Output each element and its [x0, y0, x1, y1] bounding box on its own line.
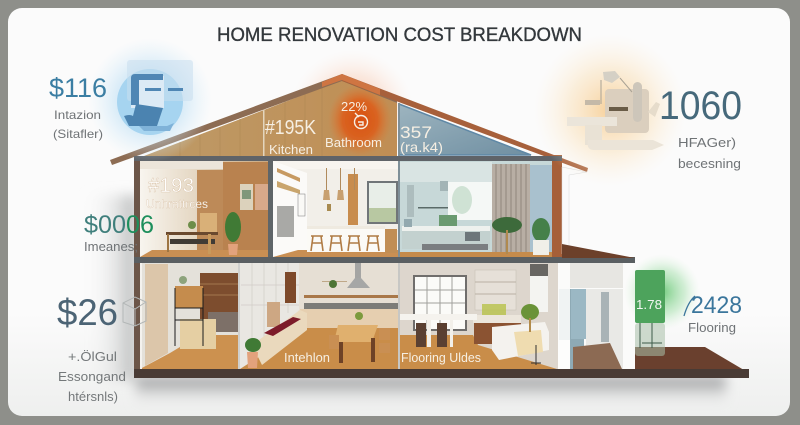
icon: box	[123, 297, 146, 326]
label: lines: Essongand	[58, 369, 126, 384]
label: Kitchen: Kitchen	[269, 142, 313, 157]
label: Intazion: Intazion	[54, 108, 101, 122]
label: 22%: 22%	[341, 99, 367, 114]
attic: bathroom hot spot	[328, 84, 392, 156]
label: beœsning: becesning	[678, 156, 741, 171]
label: Flooring: Flooring	[688, 320, 736, 335]
label: 195K: #195K	[265, 117, 317, 139]
roof: apex highlight	[322, 74, 380, 95]
floor beam: upper	[134, 156, 562, 161]
label: Intehlon: Intehlon	[284, 350, 330, 365]
label: Imeanes: Imeanes;	[84, 239, 138, 254]
label: HFAGer: HFAGer)	[678, 135, 736, 150]
left outer wall	[134, 158, 140, 378]
callout: top-right	[534, 34, 742, 186]
label: lines: htérsnls)	[68, 389, 118, 404]
callout: middle-left	[84, 211, 154, 254]
callout: bottom-left	[57, 292, 146, 404]
lower room 3	[400, 263, 558, 369]
label: Unitrattrces: Unhrattrces	[146, 197, 208, 211]
right eave glass	[562, 167, 587, 254]
right wood post	[552, 155, 562, 259]
upper room 3	[400, 161, 552, 257]
label: Flooring Uldes: Flooring Uldes	[401, 350, 481, 365]
lower roof	[562, 244, 635, 258]
callout: flooring	[624, 254, 742, 356]
glow: blue	[88, 38, 212, 162]
stat: 1060: 1060	[659, 84, 742, 128]
icon: timer	[354, 113, 368, 128]
upper room 1	[140, 161, 268, 257]
icon: slash mark	[684, 296, 695, 316]
callout: top-left	[49, 38, 212, 162]
glow: green	[624, 254, 700, 330]
roof: left slope	[110, 74, 397, 165]
label: lines: +.ÖlGul	[68, 349, 117, 364]
attic: light plank divider	[263, 108, 264, 156]
stat: $26: $26	[57, 292, 118, 333]
stat: $116: $116	[49, 73, 107, 103]
house illustration	[110, 74, 749, 378]
label: lines	[58, 349, 126, 404]
stat: 2428: 2428	[691, 292, 742, 319]
room divider	[268, 160, 273, 258]
floor slab	[134, 369, 749, 378]
label: ra.k4: (ra.k4)	[400, 139, 443, 155]
glow: orange	[534, 34, 686, 186]
green panel	[635, 270, 665, 356]
lower room 2	[240, 263, 398, 369]
label: 357: 357	[400, 123, 432, 142]
hallway section	[558, 263, 635, 369]
attic: plank lines	[180, 88, 322, 156]
panel value: 1.78	[636, 297, 662, 312]
label: Bathroom: Bathroom	[325, 135, 382, 150]
lower room 1	[140, 263, 238, 369]
house shadows	[85, 195, 726, 407]
icon: appliance	[567, 71, 664, 150]
roof: right slope	[342, 74, 588, 172]
label: 193: #193	[148, 175, 194, 197]
attic: blue section	[399, 104, 531, 155]
stat: $0006: $0006	[84, 211, 154, 239]
icon: sofa and cabinet	[117, 60, 193, 135]
glow: roof apex	[290, 50, 414, 174]
attic: wood section	[144, 80, 397, 156]
deck	[635, 347, 749, 378]
title: HOME RENOVATION COST BREAKDOWN	[217, 25, 582, 46]
house labels	[146, 99, 481, 365]
label: Sitafler: (Sitafler)	[53, 127, 103, 141]
upper room 2	[273, 161, 398, 257]
floor beam: middle	[134, 257, 635, 263]
